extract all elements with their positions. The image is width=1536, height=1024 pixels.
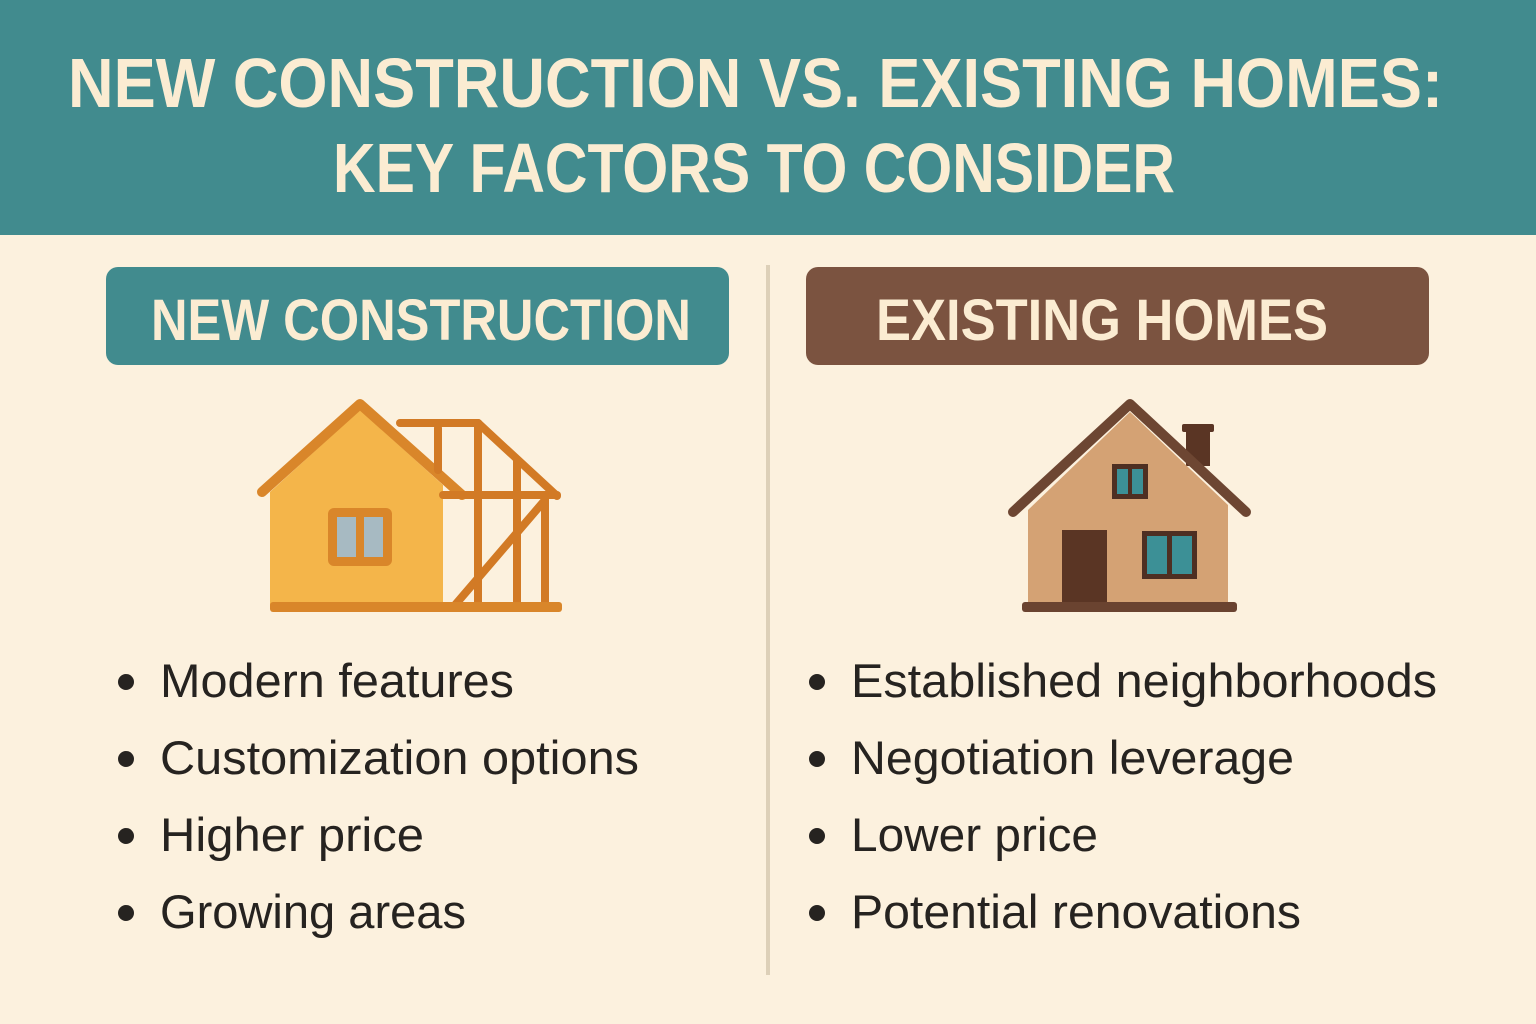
title: KEY FACTORS TO CONSIDER [333,129,1175,207]
list: new construction: Modern features [160,654,514,707]
list: new construction: Higher price [160,808,424,861]
list: new construction: Growing areas [160,885,466,938]
divider [766,265,770,975]
list: new construction [118,654,639,938]
header: new construction [106,267,729,365]
list: new construction: Customization options [160,731,639,784]
list: existing homes: Established neighborhoods [851,654,1437,707]
title banner [0,0,1536,235]
header: existing homes: EXISTING HOMES [876,288,1328,353]
list: existing homes: Lower price [851,808,1098,861]
list: existing homes [809,654,1437,938]
list: existing homes: Potential renovations [851,885,1301,938]
title [68,44,1443,207]
icon: house under construction [262,404,562,612]
header: new construction: NEW CONSTRUCTION [151,288,691,353]
list: existing homes: Negotiation leverage [851,731,1294,784]
header: existing homes [806,267,1429,365]
icon: existing house [1013,404,1246,612]
